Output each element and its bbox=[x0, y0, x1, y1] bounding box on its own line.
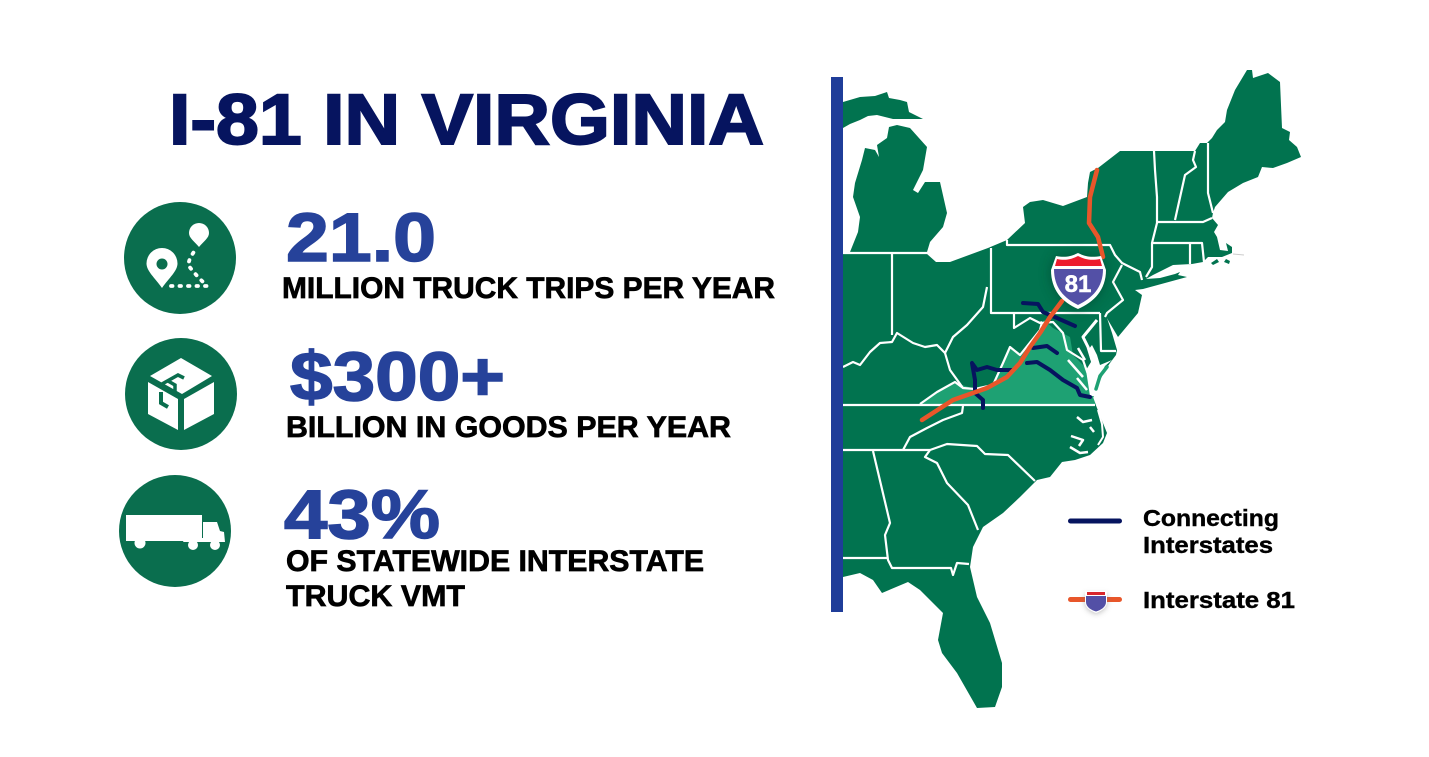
lower Michigan bbox=[850, 125, 947, 252]
legend bbox=[1068, 505, 1295, 614]
legend: connecting interstates: Interstates bbox=[1143, 532, 1273, 558]
stat label: of statewide interstate truck VMT: OF STATEWIDE INTERSTATE bbox=[286, 545, 704, 578]
stat number: $300+: $300+ bbox=[290, 338, 505, 415]
stat: goods value bbox=[125, 338, 731, 450]
vertical divider bar bbox=[831, 77, 843, 612]
map: eastern United States bbox=[843, 70, 1301, 708]
icon: truck bbox=[119, 475, 231, 587]
icon: route with map pins bbox=[124, 202, 236, 314]
bays and sounds bbox=[1068, 254, 1244, 453]
stat: truck VMT bbox=[119, 475, 704, 613]
stat label: of statewide interstate truck VMT: TRUCK VMT bbox=[286, 580, 465, 613]
stat number: 21.0: 21.0 bbox=[286, 199, 436, 276]
title: I-81 IN VIRGINIA bbox=[169, 81, 764, 160]
stat number: 43%: 43% bbox=[284, 476, 440, 553]
legend: connecting interstates: Connecting bbox=[1143, 505, 1279, 531]
legend: interstate 81: Interstate 81 bbox=[1143, 587, 1295, 613]
islands bbox=[1211, 259, 1230, 265]
state borders bbox=[843, 143, 1213, 575]
route: connecting interstates bbox=[972, 303, 1090, 408]
legend: interstate 81 bbox=[1068, 587, 1295, 614]
eastern states landmass bbox=[843, 70, 1301, 708]
stat: truck trips bbox=[124, 199, 775, 314]
route: interstate 81 bbox=[922, 170, 1103, 420]
legend: connecting interstates bbox=[1068, 505, 1279, 558]
Chesapeake Bay bbox=[1086, 345, 1112, 396]
Virginia highlight bbox=[921, 320, 1096, 405]
stat label: million truck trips per year: MILLION TRUCK TRIPS PER YEAR bbox=[282, 272, 775, 305]
stat label: billion in goods per year: BILLION IN GOODS PER YEAR bbox=[286, 411, 731, 444]
upper Michigan bbox=[843, 92, 923, 128]
icon: interstate 81 shield bbox=[1051, 253, 1106, 309]
icon: interstate 81 shield: 81 bbox=[1065, 271, 1091, 298]
Virginia eastern shore bbox=[1096, 367, 1107, 389]
shield drop shadow bbox=[1051, 253, 1106, 310]
icon: package box bbox=[125, 338, 237, 450]
